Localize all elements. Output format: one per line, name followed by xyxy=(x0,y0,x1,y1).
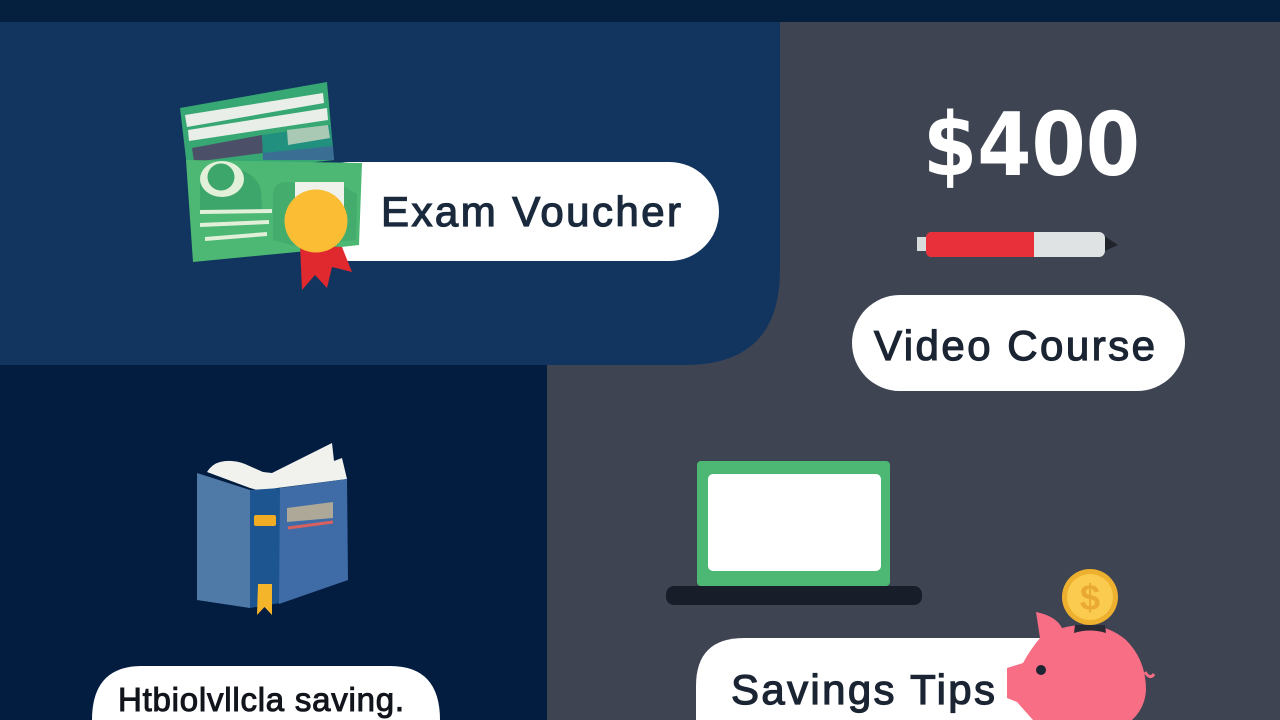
icon: piggy bank with coin xyxy=(1007,569,1154,720)
right cover xyxy=(279,479,348,604)
icon: open book xyxy=(197,443,348,615)
label: Video Course: Video Course xyxy=(874,322,1155,369)
video course pill xyxy=(852,295,1185,391)
back ticket xyxy=(180,82,334,176)
rosette xyxy=(284,190,348,252)
label: garbled saving text: Htbiolvllcla saving. xyxy=(118,681,404,718)
exam voucher pill xyxy=(300,162,719,261)
pages xyxy=(207,443,347,490)
pig eye xyxy=(1036,665,1046,675)
progress marker bar xyxy=(917,232,1118,257)
spine xyxy=(250,488,280,608)
front ticket xyxy=(186,160,362,262)
panel: top band xyxy=(0,0,1280,22)
coin xyxy=(1062,569,1118,625)
coin: $ xyxy=(1080,577,1100,618)
label: Savings Tips: Savings Tips xyxy=(731,666,995,713)
left cover xyxy=(197,473,250,608)
coin slot xyxy=(1074,625,1106,633)
pig body xyxy=(1007,612,1146,720)
icon: voucher tickets with rosette xyxy=(180,82,362,290)
ribbon xyxy=(300,245,352,290)
book pill xyxy=(92,666,440,720)
savings tips pill xyxy=(696,638,1060,720)
label: Exam Voucher: Exam Voucher xyxy=(381,188,681,235)
panel: exam voucher (top left) xyxy=(0,22,780,365)
panel: book (bottom left) xyxy=(0,365,547,720)
figure: $400: $400 xyxy=(923,94,1140,196)
icon: laptop xyxy=(666,461,922,605)
pig tail xyxy=(1145,672,1154,677)
